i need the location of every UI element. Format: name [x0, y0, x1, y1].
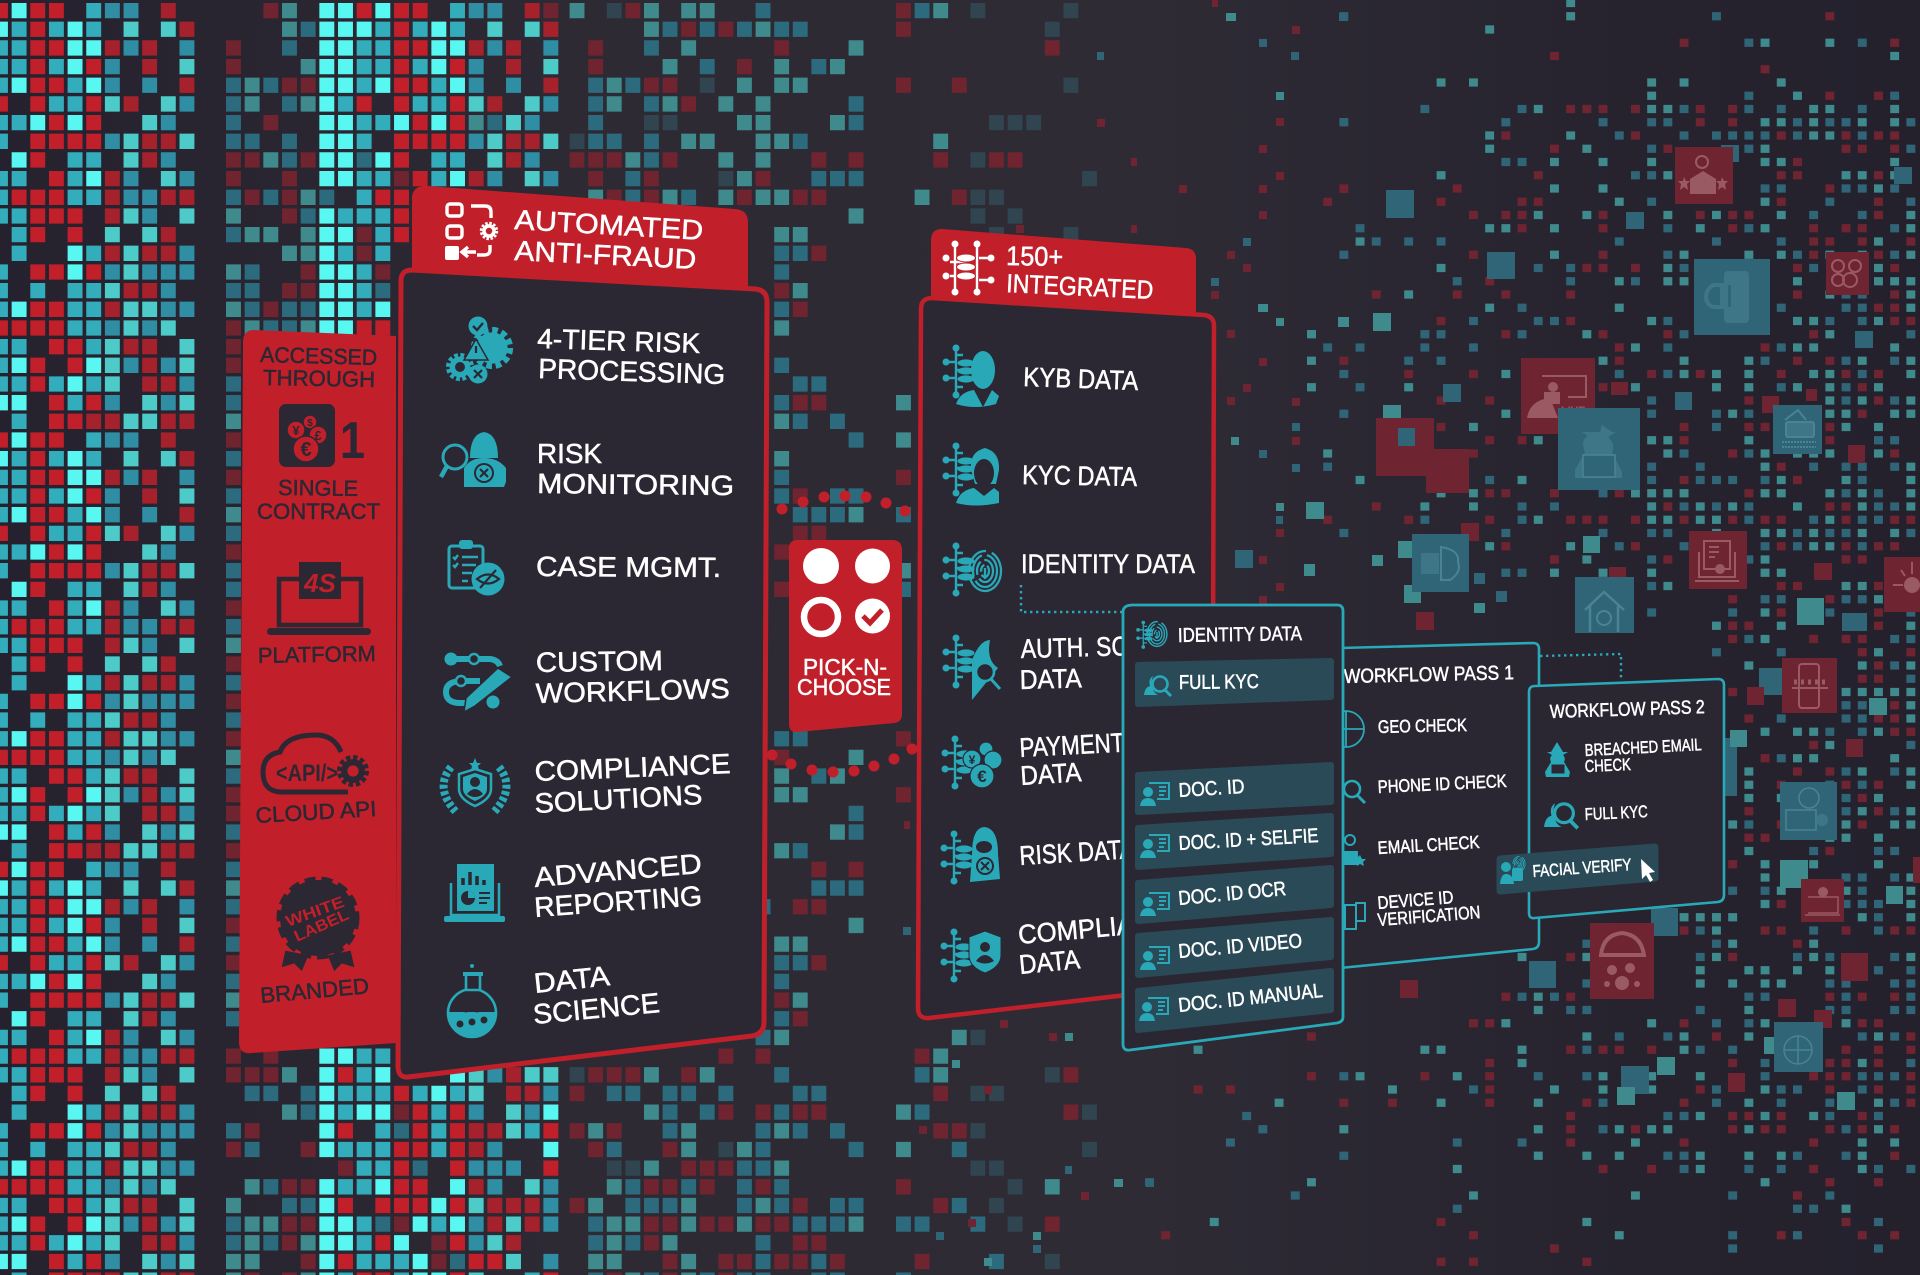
row: doc id video: DOC. ID VIDEO: [1178, 930, 1303, 963]
item: device id verification: VERIFICATION: [1377, 902, 1481, 930]
panel: 150+ integrated: [918, 229, 1214, 1018]
item: 4-tier risk processing: [448, 316, 726, 390]
chip: facial verify: FACIAL VERIFY: [1532, 855, 1632, 881]
item: data science: [448, 960, 661, 1037]
icon: cloud api: <API/>: [276, 760, 338, 787]
header: 150+ integrated: [931, 229, 1196, 320]
header: 150+ integrated: 150+: [1006, 241, 1063, 272]
row: doc id ocr: DOC. ID OCR: [1177, 878, 1287, 910]
panel: workflow pass 2: WORKFLOW PASS 2: [1549, 697, 1705, 723]
item: case management: [449, 540, 721, 596]
row: doc id video: [1138, 920, 1331, 975]
panel: automated anti-fraud: [398, 186, 767, 1077]
icon: white label badge: WHITE: [284, 894, 347, 931]
item: risk monitoring: [441, 432, 734, 501]
icon: white label badge: [279, 879, 357, 972]
icon tile: card: [1773, 405, 1822, 454]
icon: data hub: [942, 240, 994, 296]
header: automated anti-fraud: AUTOMATED: [514, 204, 704, 246]
item: phone id check: PHONE ID CHECK: [1377, 771, 1507, 797]
item: full kyc: [1544, 802, 1648, 828]
icon tile: globe id: [1780, 782, 1837, 840]
text: pick-n-choose: [797, 654, 891, 700]
item: advanced reporting: REPORTING: [533, 880, 703, 923]
icon tile: right edge: [1884, 557, 1920, 612]
icon tile: email stars: [1675, 147, 1733, 204]
heading: accessed through: [260, 342, 377, 392]
text: pick-n-choose: CHOOSE: [797, 674, 891, 700]
panel: accessed through: [239, 330, 396, 1053]
panel: workflow pass 2: [1529, 679, 1724, 918]
icon: cursor: [1641, 859, 1655, 882]
item: compliance solutions: COMPLIANCE: [534, 748, 731, 787]
icon: currency coins tile: $: [307, 418, 313, 429]
panel: identity data popup: [1123, 605, 1343, 1050]
row: doc id: DOC. ID: [1178, 776, 1245, 802]
item: breached email check: CHECK: [1584, 755, 1632, 776]
icon tile: live selfie: [1521, 358, 1595, 434]
item: auth score data: AUTH. SCORE: [1020, 630, 1178, 664]
text: single contract: CONTRACT: [257, 499, 380, 524]
item: breached email check: [1545, 735, 1702, 777]
row: doc id: [1138, 765, 1331, 812]
item: data science: SCIENCE: [532, 987, 661, 1030]
item: full kyc: FULL KYC: [1584, 802, 1648, 824]
item: payment data: DATA: [1019, 757, 1082, 791]
item: advanced reporting: [444, 848, 703, 923]
pattern: fading pixel columns: [570, 11, 1097, 1275]
pattern: sparse squares right side: [1145, 3, 1915, 1262]
icon: automation: [445, 204, 497, 260]
item: payment data: ¥: [969, 753, 976, 767]
dotted arc: top: [776, 490, 910, 516]
icon: currency coins tile: ¥: [292, 423, 300, 438]
row: doc id ocr: [1138, 868, 1331, 921]
number one: 1: [340, 412, 365, 470]
item: kyc data: [942, 442, 1137, 506]
icon tile: phone keypad: [1782, 658, 1837, 713]
tile: red plain pair: [1376, 418, 1469, 493]
item: 4-tier risk processing: 4-TIER RISK: [537, 323, 701, 359]
item: case management: CASE MGMT.: [536, 551, 721, 583]
row: full kyc: [1138, 661, 1331, 704]
item: risk monitoring: RISK: [537, 438, 602, 469]
icon tile: phone id: [1694, 259, 1770, 335]
item: payment data: €: [977, 767, 987, 786]
item: risk data: RISK DATA: [1019, 834, 1135, 871]
pattern: scattered squares centre: [903, 3, 1348, 1262]
panel: workflow pass 1: [1328, 643, 1539, 968]
item: device id verification: DEVICE ID: [1377, 887, 1454, 913]
icon: 4S platform laptop: 4S: [303, 568, 337, 598]
row: doc id selfie: [1138, 816, 1331, 867]
panel body: [398, 270, 767, 1077]
large tiles: right scatter: [1235, 145, 1920, 1110]
item: compliance data: [940, 905, 1189, 982]
icon tile: spy email: [1558, 408, 1640, 490]
item: email check: [1344, 832, 1480, 866]
item: risk monitoring: MONITORING: [537, 468, 734, 501]
heading: accessed through: ACCESSED: [260, 342, 377, 370]
item: advanced reporting: ADVANCED: [533, 848, 703, 893]
heading: identity data: IDENTITY DATA: [1178, 623, 1303, 647]
item: kyc data: KYC DATA: [1022, 460, 1137, 492]
item: kyb data: KYB DATA: [1023, 362, 1139, 396]
pattern: dense left pixel block: [0, 11, 194, 1275]
icon tile: globe search: [1774, 1022, 1823, 1072]
panel body: [918, 298, 1214, 1018]
item: kyb data: [942, 344, 1139, 407]
item: identity data: [942, 542, 1195, 596]
item: 4-tier risk processing: PROCESSING: [538, 353, 726, 390]
heading: accessed through: THROUGH: [263, 365, 375, 392]
icon tile: executive report: [1801, 879, 1844, 922]
item: auth score data: DATA: [1019, 663, 1082, 695]
item: compliance solutions: [444, 748, 731, 819]
icon: 4S platform laptop: [267, 562, 371, 635]
item: payment data: PAYMENT: [1019, 728, 1125, 763]
item: payment data: [942, 728, 1125, 791]
icon: currency coins tile: £: [314, 428, 322, 443]
heading: identity data: [1136, 621, 1303, 649]
item: risk data: [940, 827, 1135, 884]
panel: pick-n-choose: [789, 540, 902, 732]
text: single contract: [257, 475, 380, 524]
connector: identity to popup: [1021, 585, 1122, 612]
text: single contract: SINGLE: [278, 475, 358, 501]
item: custom workflows: WORKFLOWS: [535, 673, 730, 709]
item: data science: DATA: [532, 960, 612, 999]
item: compliance data: COMPLIANCE: [1017, 905, 1189, 950]
icon: cloud api: [263, 735, 367, 792]
pattern: central pixel columns: [226, 11, 558, 1275]
header: automated anti-fraud: [412, 186, 748, 300]
icon tile: house: [1575, 577, 1634, 633]
chip: facial verify: [1500, 847, 1655, 891]
icon: currency coins tile: [279, 404, 335, 467]
header: automated anti-fraud: ANTI-FRAUD: [514, 235, 697, 275]
connector: pass 1 to pass 2: [1540, 654, 1621, 680]
icon tile: coins: [1826, 252, 1869, 295]
icon tile: roulette: [1590, 923, 1654, 999]
item: compliance solutions: SOLUTIONS: [534, 779, 703, 819]
text: branded: BRANDED: [259, 973, 370, 1008]
item: auth score data: [942, 630, 1178, 700]
row: doc id manual: DOC. ID MANUAL: [1177, 980, 1324, 1017]
item: custom workflows: [444, 645, 730, 712]
item: geo check: [1328, 711, 1467, 747]
item: breached email check: BREACHED EMAIL: [1584, 735, 1702, 760]
dotted arc: bottom: [766, 744, 918, 778]
item: identity data: IDENTITY DATA: [1021, 549, 1195, 579]
row: full kyc: FULL KYC: [1179, 671, 1259, 694]
icon tile: report: [1689, 531, 1747, 589]
icon tile: live selfie: LIVE: [1561, 405, 1585, 417]
text: cloud api: CLOUD API: [255, 796, 377, 828]
text: pick-n-choose: PICK-N-: [803, 654, 887, 680]
header: 150+ integrated: INTEGRATED: [1006, 268, 1154, 305]
item: compliance data: DATA: [1018, 944, 1081, 980]
icon tile: brain question: [1412, 534, 1469, 592]
item: geo check: GEO CHECK: [1378, 715, 1467, 737]
icon: white label badge: LABEL: [292, 906, 352, 946]
item: device id verification: [1345, 887, 1481, 930]
icon: option dots: [803, 548, 890, 634]
icon: currency coins tile: €: [300, 439, 312, 461]
item: custom workflows: CUSTOM: [536, 645, 663, 678]
panel: workflow pass 1: WORKFLOW PASS 1: [1344, 662, 1514, 688]
text: platform: PLATFORM: [258, 641, 376, 668]
item: email check: EMAIL CHECK: [1377, 832, 1480, 858]
row: doc id manual: [1138, 971, 1331, 1030]
row: doc id selfie: DOC. ID + SELFIE: [1178, 825, 1319, 855]
item: phone id check: [1344, 771, 1507, 803]
